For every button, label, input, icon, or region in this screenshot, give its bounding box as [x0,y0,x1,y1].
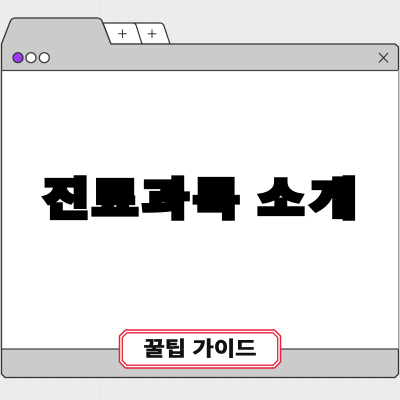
close icon [379,53,388,62]
white content area [2,70,398,349]
plus icon [118,30,127,38]
inactive tab 2 [134,23,170,44]
plus icon [148,30,156,38]
badge: tip guide [120,330,280,368]
window control dots [13,53,49,63]
title: 진료과목 소개 [43,176,357,224]
badge label: 꿀팁 가이드 [144,338,256,360]
inactive tab 1 [103,23,142,44]
